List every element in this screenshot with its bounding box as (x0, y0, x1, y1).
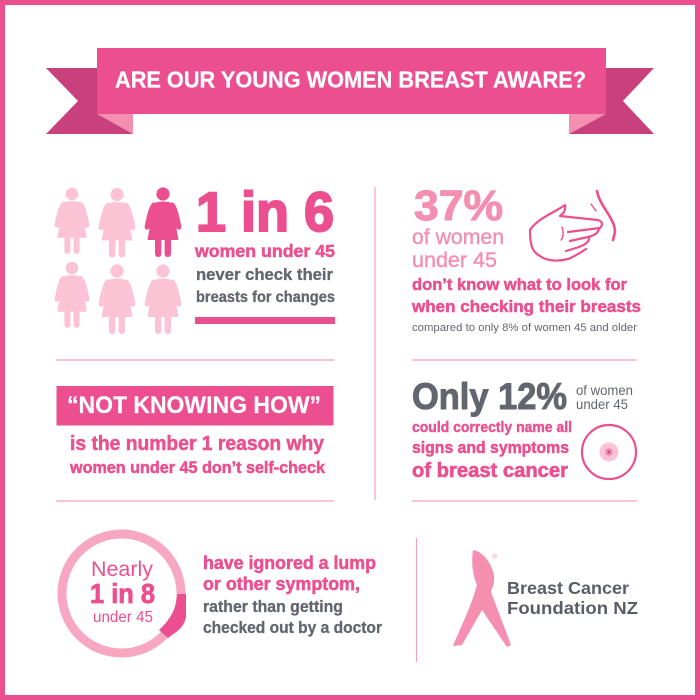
ribbon tail right (569, 68, 654, 134)
quote: “NOT KNOWING HOW” (67, 392, 321, 419)
comparison note: compared to only 8% of women 45 and older (412, 322, 637, 334)
title: ARE OUR YOUNG WOMEN BREAST AWARE? (115, 66, 586, 92)
ribbon tail left (46, 68, 133, 134)
ribbon main (97, 48, 606, 114)
ring text (90, 557, 155, 626)
panel: 1 in 6 (57, 180, 335, 334)
stat qualifier (576, 383, 633, 412)
ring chart (62, 534, 186, 653)
ribbon fold right (569, 114, 606, 134)
underline bar (195, 317, 335, 324)
big stat: 37% (414, 182, 503, 230)
logo: Breast Cancer Foundation NZ (453, 550, 638, 647)
description (203, 553, 383, 637)
stat caption: under 45 (412, 248, 497, 272)
description (412, 420, 572, 482)
reason line 1: is the number 1 reason why (70, 433, 325, 455)
description (411, 275, 641, 316)
panel: 37% (411, 182, 641, 334)
ring text: under 45 (93, 609, 153, 626)
big stat: 1 in 6 (196, 180, 334, 243)
ribbon fold left (97, 114, 133, 134)
panel: nearly 1 in 8 (62, 534, 383, 653)
stat caption: women under 45 (194, 241, 335, 261)
description: of breast cancer (412, 459, 568, 482)
ring text: 1 in 8 (90, 578, 155, 609)
icon: pink ribbon (453, 550, 511, 647)
panel: not knowing how (56, 386, 334, 477)
stat qualifier: of women (576, 383, 633, 398)
icon: six women (57, 187, 179, 334)
ring text: Nearly (91, 557, 153, 581)
description: when checking their breasts (411, 297, 641, 316)
logo name: Breast Cancer (507, 578, 629, 598)
stat description: breasts for changes (196, 289, 335, 306)
description: have ignored a lump (203, 553, 376, 573)
reason line 2: women under 45 don’t self-check (69, 459, 326, 477)
registered mark: ® (492, 553, 498, 561)
logo name (507, 578, 638, 618)
description: rather than getting (203, 598, 343, 616)
quote box (56, 386, 334, 426)
logo name: Foundation NZ (507, 598, 638, 618)
icon: breast with lump (582, 425, 636, 479)
stat caption (412, 225, 504, 272)
stat description: never check their (196, 265, 333, 284)
description: could correctly name all (412, 420, 572, 436)
description: don’t know what to look for (412, 275, 627, 294)
stat qualifier: under 45 (576, 397, 628, 412)
stat description (196, 265, 335, 306)
description: checked out by a doctor (203, 619, 383, 637)
big stat: Only 12% (412, 376, 567, 417)
stat caption: of women (412, 225, 504, 249)
title banner (46, 48, 654, 134)
panel: only 12% (412, 376, 636, 482)
description: or other symptom, (203, 574, 360, 594)
icon: hand on breast (530, 191, 615, 261)
description: signs and symptoms (412, 439, 569, 457)
